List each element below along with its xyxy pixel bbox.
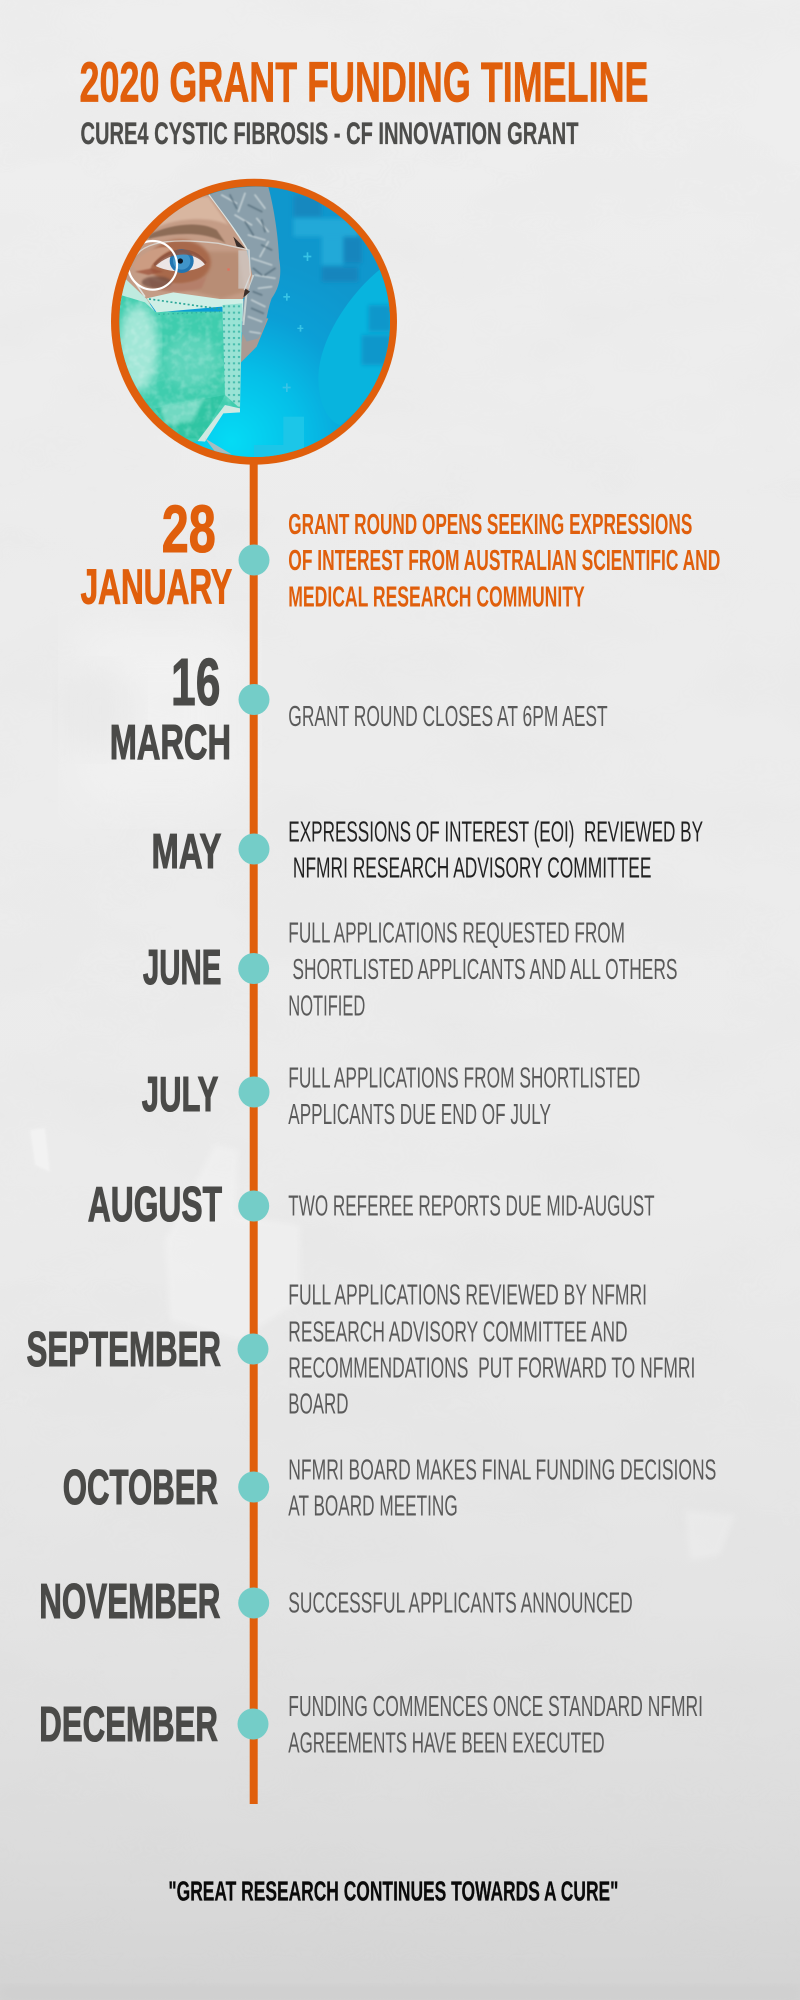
entry: July: JULY [142,1067,218,1122]
entry: 16 March: 16 [171,645,220,720]
entry: October [63,1454,716,1523]
entry: June: NOTIFIED [288,991,365,1023]
entry: July [142,1063,640,1131]
entry: September: SEPTEMBER [26,1322,221,1377]
eyebrow [148,225,226,243]
entry: August: AUGUST [88,1177,222,1232]
eye [153,249,207,273]
entry: October: OCTOBER [63,1460,218,1515]
photo: masked researcher in circular frame [111,179,397,465]
right blob [318,261,392,425]
entry: September [26,1280,695,1421]
safety glasses [130,241,250,297]
entry: June [143,918,677,1023]
face skin [115,195,252,303]
entry: 28 January [81,492,720,614]
entry: December [39,1691,703,1760]
entry: June: JUNE [143,940,221,995]
entry: October: AT BOARD MEETING [288,1491,458,1523]
entry: November [39,1574,633,1629]
entry: May [152,817,703,885]
timeline markers [238,544,270,1740]
entry: December: DECEMBER [39,1697,218,1752]
white ring [128,241,177,290]
entry: November: NOVEMBER [39,1574,220,1629]
surgical mask [115,275,245,454]
neck [240,318,268,363]
hair net [208,187,280,342]
entry: August [88,1177,655,1232]
entry: 16 March: MARCH [110,715,231,770]
entry: July: APPLICANTS DUE END OF JULY [288,1099,551,1131]
entry: 28 January: MEDICAL RESEARCH COMMUNITY [288,582,585,614]
entry: May: MAY [152,824,221,879]
timeline vertical line [250,460,258,1804]
entry: 28 January: 28 [162,492,216,567]
entry: 28 January: JANUARY [81,560,232,614]
background crosses [293,195,362,282]
nose bridge seen through ring [146,246,173,268]
entry: September: BOARD [288,1389,348,1421]
entry: 16 March [110,645,608,770]
eye socket [149,240,211,285]
